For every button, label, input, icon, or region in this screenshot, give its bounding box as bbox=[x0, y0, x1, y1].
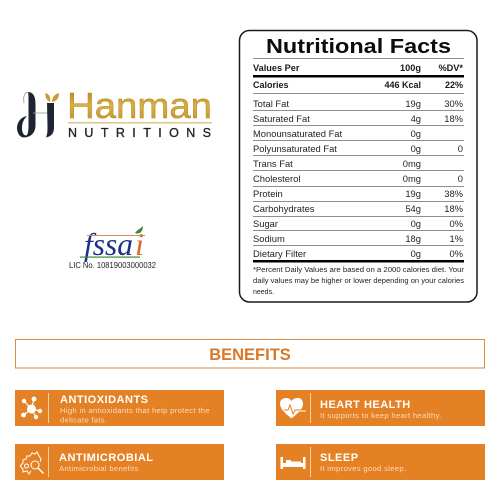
nutrient rows: 0mg bbox=[403, 158, 421, 169]
nutrient rows: 0 bbox=[458, 173, 463, 184]
licence number: LIC No. 10819003000032 bbox=[69, 260, 156, 270]
card divider bbox=[310, 447, 311, 477]
card text: It improves good sleep. bbox=[320, 464, 406, 473]
nutrient rows bbox=[253, 98, 463, 259]
nutrient rows: Carbohydrates bbox=[253, 203, 315, 214]
card background bbox=[276, 390, 485, 426]
table rules bbox=[253, 58, 464, 262]
card divider bbox=[48, 447, 49, 477]
calories row: 446 Kcal bbox=[384, 80, 421, 90]
footnote: daily values may be higher or lower depending on your calories bbox=[253, 278, 465, 285]
card divider bbox=[310, 393, 311, 423]
calories row: Calories bbox=[253, 80, 289, 90]
card: sleep bbox=[276, 444, 485, 480]
table header row: Values Per bbox=[253, 63, 300, 73]
card title: HEART HEALTH bbox=[320, 399, 411, 411]
logo wordmark: Nutritions: NUTRITIONS bbox=[68, 126, 211, 140]
card background bbox=[276, 444, 485, 480]
nutrient rows: Total Fat bbox=[253, 98, 289, 109]
icon: logo monogram bbox=[17, 92, 59, 138]
nutrient rows: 0g bbox=[411, 128, 421, 139]
logo: fssai bbox=[69, 226, 156, 270]
nutrient rows: 0g bbox=[411, 143, 421, 154]
logo wordmark: Hanman: Hanman bbox=[67, 85, 212, 126]
card divider bbox=[48, 393, 49, 423]
fssai wordmark: fssa bbox=[84, 226, 133, 262]
table header row: %DV* bbox=[438, 63, 463, 73]
nutrient rows: 19g bbox=[405, 188, 421, 199]
nutrient rows: 0% bbox=[449, 218, 463, 229]
card text: It supports to keep heart healthy. bbox=[320, 411, 442, 420]
card background bbox=[15, 390, 224, 426]
nutrient rows: 4g bbox=[411, 113, 421, 124]
nutrient rows: Monounsaturated Fat bbox=[253, 128, 343, 139]
heading: Nutritional Facts bbox=[266, 36, 451, 58]
calories row: 22% bbox=[445, 80, 463, 90]
card: antioxidants bbox=[15, 390, 224, 426]
nutrient rows: 54g bbox=[405, 203, 421, 214]
footnote: *Percent Daily Values are based on a 2000 calories diet. Your bbox=[253, 267, 465, 274]
nutrient rows: 30% bbox=[444, 98, 463, 109]
card text: Antimicrobial benefits bbox=[59, 464, 139, 473]
card title: SLEEP bbox=[320, 452, 359, 464]
icon: microbe with magnifier bbox=[20, 452, 44, 474]
footnote: needs. bbox=[253, 289, 274, 296]
nutrient rows: 1% bbox=[449, 233, 463, 244]
fssai orange rule bbox=[87, 235, 145, 236]
nutrient rows: 0 bbox=[458, 143, 463, 154]
card title: ANTIMICROBIAL bbox=[59, 452, 154, 464]
card: antimicrobial bbox=[15, 444, 224, 480]
nutrient rows: 0% bbox=[449, 248, 463, 259]
nutrient rows: 38% bbox=[444, 188, 463, 199]
calories row bbox=[253, 80, 463, 90]
table header row: 100g bbox=[400, 63, 421, 73]
panel: nutritional facts bbox=[240, 30, 477, 302]
heading: benefits bbox=[16, 340, 484, 368]
nutrient rows: Protein bbox=[253, 188, 283, 199]
nutrient rows: 18% bbox=[444, 113, 463, 124]
nutrient rows: Sodium bbox=[253, 233, 285, 244]
nutrient rows: 18% bbox=[444, 203, 463, 214]
icon: molecule bbox=[21, 397, 42, 419]
card background bbox=[15, 444, 224, 480]
nutrient rows: Polyunsaturated Fat bbox=[253, 143, 337, 154]
nutrient rows: Cholesterol bbox=[253, 173, 300, 184]
nutrient rows: Trans Fat bbox=[253, 158, 293, 169]
nutrient rows: Dietary Filter bbox=[253, 248, 306, 259]
card: heart health bbox=[276, 390, 485, 426]
benefits title: BENEFITS bbox=[209, 346, 291, 364]
table header row bbox=[253, 63, 463, 73]
logo: Hanman Nutritions bbox=[17, 85, 212, 140]
card title: ANTIOXIDANTS bbox=[60, 394, 148, 406]
card text: High in antioxidants that help protect the bbox=[60, 406, 210, 415]
card text bbox=[60, 406, 210, 424]
icon: heart with pulse bbox=[280, 398, 306, 418]
icon: bed bbox=[280, 457, 306, 469]
fssai letter i: i bbox=[135, 226, 144, 262]
nutrient rows: 18g bbox=[405, 233, 421, 244]
panel border bbox=[240, 30, 477, 302]
nutrient rows: 19g bbox=[405, 98, 421, 109]
card text: delicate fats. bbox=[60, 416, 107, 424]
nutrient rows: 0mg bbox=[403, 173, 421, 184]
nutrient rows: 0g bbox=[411, 248, 421, 259]
fssai leaf bbox=[135, 226, 143, 234]
fssai green rule bbox=[80, 256, 140, 258]
footnote bbox=[253, 267, 465, 296]
nutrient rows: 0g bbox=[411, 218, 421, 229]
nutrient rows: Saturated Fat bbox=[253, 113, 310, 124]
nutrient rows: Sugar bbox=[253, 218, 278, 229]
benefits frame bbox=[16, 340, 484, 368]
logo rule bbox=[68, 122, 212, 124]
